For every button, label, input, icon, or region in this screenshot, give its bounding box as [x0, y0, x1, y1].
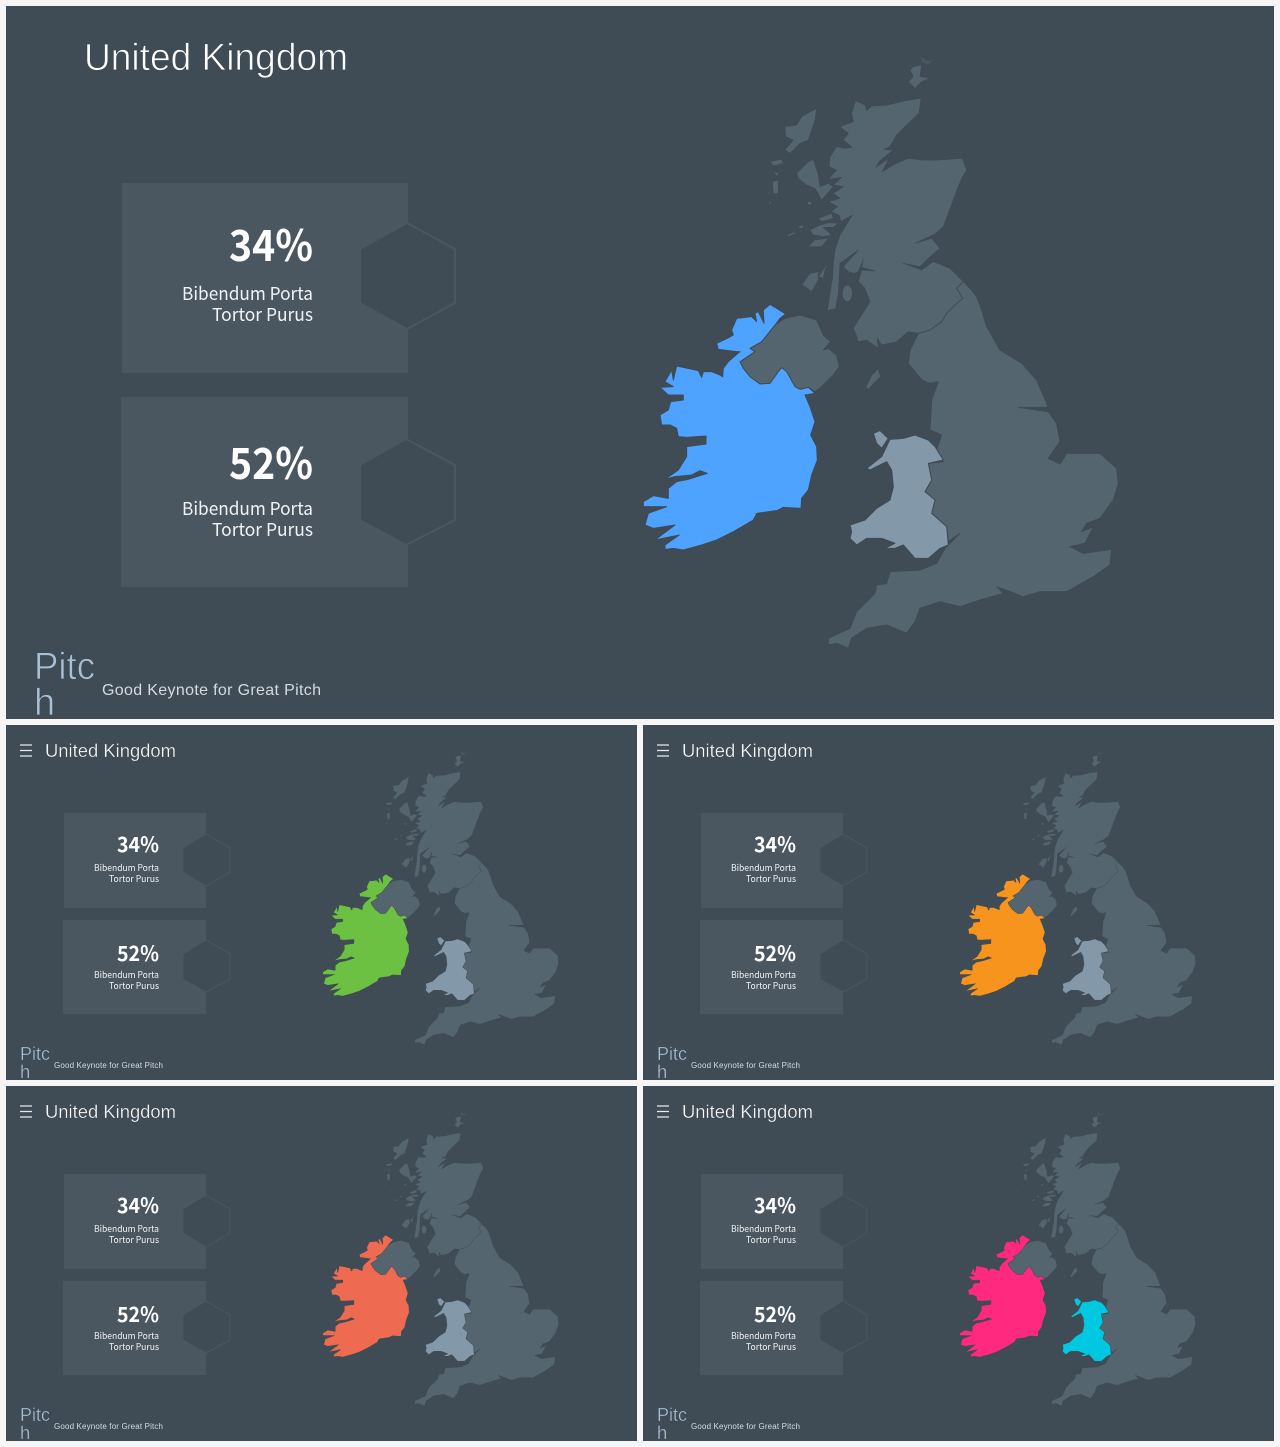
panel: stat 34%: 34% — [754, 1190, 796, 1220]
footer brand: Pitc — [657, 1043, 687, 1064]
panel: stat 52%: Bibendum Porta — [731, 968, 796, 981]
heading: United Kingdom — [682, 1101, 813, 1122]
icon: menu — [657, 745, 669, 756]
panel: stat 52%: Tortor Purus — [212, 516, 313, 542]
panel: stat 34%: 34% — [229, 212, 313, 274]
panel: stat 52% — [121, 397, 455, 587]
panel: stat 34%: Tortor Purus — [109, 1233, 159, 1246]
panel: stat 34% — [64, 1174, 230, 1269]
heading: United Kingdom — [45, 1101, 176, 1122]
panel: stat 34% — [64, 813, 230, 908]
panel: stat 52%: 52% — [229, 430, 313, 492]
panel: stat 52%: Bibendum Porta — [182, 495, 313, 521]
footer brand — [657, 1043, 800, 1082]
title: United Kingdom — [84, 37, 348, 79]
panel: stat 52%: Tortor Purus — [109, 1340, 159, 1353]
panel: stat 34%: Tortor Purus — [212, 301, 313, 327]
heading: United Kingdom — [45, 740, 176, 761]
panel: stat 34%: Tortor Purus — [746, 1233, 796, 1246]
panel: stat 34%: Bibendum Porta — [731, 1222, 796, 1235]
map of UK and Ireland — [643, 55, 1118, 648]
footer brand: Pitc — [34, 646, 95, 688]
slide: main blue — [6, 6, 1274, 724]
footer brand: Pitc — [657, 1404, 687, 1425]
footer brand — [657, 1404, 800, 1443]
footer brand: Good Keynote for Great Pitch — [102, 682, 321, 699]
panel: stat 52% — [700, 920, 867, 1014]
panel: stat 52%: Tortor Purus — [746, 1340, 796, 1353]
panel: stat 52%: 52% — [754, 938, 796, 968]
footer brand: h — [657, 1422, 667, 1443]
panel: stat 52% — [63, 920, 230, 1014]
panel: stat 34%: Bibendum Porta — [94, 1222, 159, 1235]
panel: stat 52% — [63, 1281, 230, 1375]
footer brand — [20, 1404, 163, 1443]
panel: stat 52%: Bibendum Porta — [94, 968, 159, 981]
panel: stat 34%: 34% — [117, 829, 159, 859]
heading: United Kingdom — [682, 740, 813, 761]
icon: menu — [20, 1106, 32, 1117]
footer brand: h — [657, 1061, 667, 1082]
slide: green — [6, 725, 637, 1082]
panel: stat 52%: Bibendum Porta — [731, 1329, 796, 1342]
icon: menu — [20, 745, 32, 756]
panel: stat 34% — [122, 183, 455, 373]
footer brand: Good Keynote for Great Pitch — [54, 1061, 163, 1070]
panel: stat 34%: Tortor Purus — [746, 872, 796, 885]
panel: stat 52%: Tortor Purus — [109, 979, 159, 992]
slide: orange — [643, 725, 1274, 1082]
panel: stat 52%: 52% — [754, 1299, 796, 1329]
footer brand: Good Keynote for Great Pitch — [54, 1422, 163, 1431]
map — [323, 1111, 559, 1406]
map — [960, 1111, 1196, 1406]
slide: red — [6, 1086, 637, 1443]
panel: stat 52%: 52% — [117, 1299, 159, 1329]
panel: stat 52%: 52% — [117, 938, 159, 968]
footer brand — [34, 646, 321, 724]
footer brand: Pitc — [20, 1043, 50, 1064]
panel: stat 34% — [701, 1174, 867, 1269]
footer brand: h — [20, 1061, 30, 1082]
panel: stat 52%: Bibendum Porta — [94, 1329, 159, 1342]
footer brand: h — [34, 682, 55, 724]
panel: stat 34%: Bibendum Porta — [731, 861, 796, 874]
panel: stat 34%: Bibendum Porta — [182, 280, 313, 306]
panel: stat 52% — [700, 1281, 867, 1375]
panel: stat 52%: Tortor Purus — [746, 979, 796, 992]
map — [323, 750, 559, 1045]
panel: stat 34%: 34% — [117, 1190, 159, 1220]
panel: stat 34%: 34% — [754, 829, 796, 859]
footer brand: Good Keynote for Great Pitch — [691, 1061, 800, 1070]
icon: menu — [657, 1106, 669, 1117]
panel: stat 34%: Tortor Purus — [109, 872, 159, 885]
footer brand: Pitc — [20, 1404, 50, 1425]
slide: pink and cyan — [643, 1086, 1274, 1443]
panel: stat 34% — [701, 813, 867, 908]
footer brand: Good Keynote for Great Pitch — [691, 1422, 800, 1431]
map — [960, 750, 1196, 1045]
footer brand: h — [20, 1422, 30, 1443]
footer brand — [20, 1043, 163, 1082]
panel: stat 34%: Bibendum Porta — [94, 861, 159, 874]
